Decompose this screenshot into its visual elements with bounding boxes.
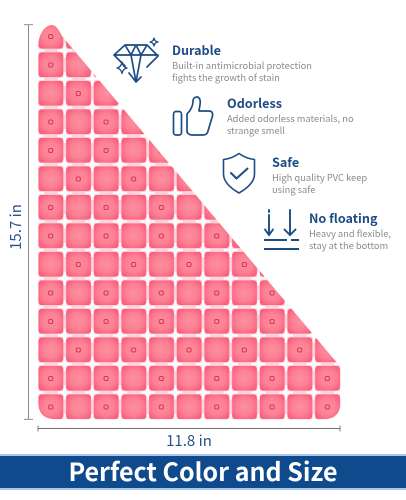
text: Odorless description bbox=[227, 111, 354, 136]
dimension: height label: 15.7 in bbox=[5, 204, 26, 250]
text: No floating description bbox=[309, 226, 391, 252]
text: No floating description: stay at the bottom bbox=[309, 238, 388, 252]
heading: Safe: Safe bbox=[272, 152, 299, 171]
text: Safe description: High quality PVC keep bbox=[272, 170, 367, 184]
banner: Perfect Color and Size: Perfect Color and Size bbox=[68, 453, 338, 489]
text: Durable description: Built-in antimicrobial protection bbox=[172, 58, 312, 72]
text: Odorless description: Added odorless materials, no bbox=[227, 111, 354, 125]
heading: Durable: Durable bbox=[172, 40, 221, 59]
dimension: width label: 11.8 in bbox=[166, 430, 212, 451]
text: Odorless description: strange smell bbox=[227, 122, 285, 136]
text: Durable description: fights the growth of stain bbox=[172, 70, 280, 84]
text: Safe description: using safe bbox=[272, 182, 315, 196]
text: Safe description bbox=[272, 170, 367, 196]
banner: Perfect Color and Size bbox=[0, 454, 406, 490]
heading: No floating: No floating bbox=[309, 208, 377, 227]
heading: Odorless: Odorless bbox=[227, 93, 282, 112]
text: Durable description bbox=[172, 58, 312, 84]
text: No floating description: Heavy and flexible, bbox=[309, 226, 391, 240]
mat: triangular pink bath mat bbox=[38, 25, 341, 420]
